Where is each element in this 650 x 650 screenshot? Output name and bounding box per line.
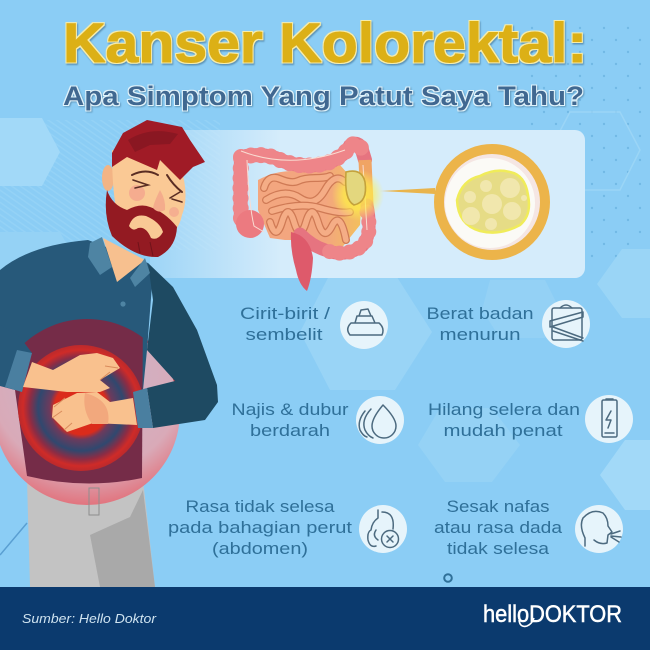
icon: tumour spot xyxy=(346,171,366,205)
icon: scale with tape xyxy=(542,300,590,348)
inner pain rings xyxy=(18,345,144,471)
nose xyxy=(153,190,165,212)
background texture xyxy=(0,20,650,260)
background lines xyxy=(0,523,97,568)
trouser shade xyxy=(90,490,155,587)
symptom: hilang selera xyxy=(428,395,633,443)
symptom: sesak nafas xyxy=(434,497,623,558)
connector line xyxy=(380,188,435,194)
beard xyxy=(106,190,177,257)
subtitle: Apa Simptom Yang Patut Saya Tahu? xyxy=(63,81,584,111)
source text: Sumber: Hello Doktor xyxy=(22,611,157,626)
trousers xyxy=(27,480,155,587)
icon: stomach xyxy=(359,505,407,553)
background hexagons xyxy=(0,112,650,510)
symptom: cirit-birit: Cirit-birit / xyxy=(240,304,330,323)
symptom: sesak nafas: tidak selesa xyxy=(447,539,550,558)
left sleeve xyxy=(0,325,32,390)
hair xyxy=(112,120,205,180)
symptom: rasa tidak selesa: pada bahagian perut xyxy=(168,518,352,537)
symptom: sesak nafas: atau rasa dada xyxy=(434,518,563,537)
symptom: cirit-birit xyxy=(240,301,388,349)
finger lines xyxy=(52,366,118,430)
blush xyxy=(129,185,145,201)
head xyxy=(102,120,205,257)
icon: small intestine xyxy=(258,165,362,250)
symptom: rasa tidak selesa: (abdomen) xyxy=(212,539,308,558)
icon: stool xyxy=(340,301,388,349)
symptom: berat badan: menurun xyxy=(440,325,520,344)
stethoscope arc xyxy=(519,618,534,626)
ear xyxy=(102,165,114,191)
shirt body xyxy=(0,240,153,390)
symptom: najis xyxy=(232,396,404,444)
neck xyxy=(103,238,145,282)
figure: man in pain xyxy=(0,120,218,587)
symptom: najis: berdarah xyxy=(250,421,330,440)
burgundy tinted shirt xyxy=(15,319,143,484)
face xyxy=(112,150,186,240)
wrist shade xyxy=(84,393,109,424)
symptom: berat badan xyxy=(426,300,590,348)
right sleeve xyxy=(147,263,218,428)
collar xyxy=(88,237,150,287)
small ring xyxy=(444,574,452,582)
lower hand xyxy=(52,392,137,432)
upper hand xyxy=(23,353,120,392)
symptom: hilang selera: mudah penat xyxy=(444,421,563,440)
chin patch xyxy=(129,215,163,239)
shirt button xyxy=(120,301,126,307)
pain circle rim xyxy=(147,341,177,388)
eyes xyxy=(133,180,182,202)
symptom: cirit-birit: sembelit xyxy=(246,325,323,344)
hair shade xyxy=(128,131,178,152)
panel: colon illustration xyxy=(150,130,585,291)
icon: head breathing xyxy=(575,505,623,553)
brows xyxy=(132,172,182,192)
belt loop xyxy=(89,488,99,515)
icon: blood drops xyxy=(356,396,404,444)
symptom: berat badan: Berat badan xyxy=(426,304,534,323)
title: Kanser Kolorektal: xyxy=(63,11,587,74)
outer pain circle xyxy=(0,319,180,505)
logo: helloDOKTOR xyxy=(483,601,622,628)
beard lines xyxy=(138,242,153,256)
icon: battery xyxy=(585,395,633,443)
cuffs xyxy=(5,350,153,428)
icon: magnified tumour xyxy=(439,149,545,255)
footer bar xyxy=(0,587,650,650)
icon: glow at tumour xyxy=(332,169,384,221)
symptom: sesak nafas: Sesak nafas xyxy=(446,497,550,516)
symptom: hilang selera: Hilang selera dan xyxy=(428,400,580,419)
symptom: najis: Najis & dubur xyxy=(232,400,349,419)
icon: large intestine xyxy=(236,144,369,291)
symptom: rasa tidak selesa xyxy=(168,497,407,558)
symptom: rasa tidak selesa: Rasa tidak selesa xyxy=(186,497,335,516)
